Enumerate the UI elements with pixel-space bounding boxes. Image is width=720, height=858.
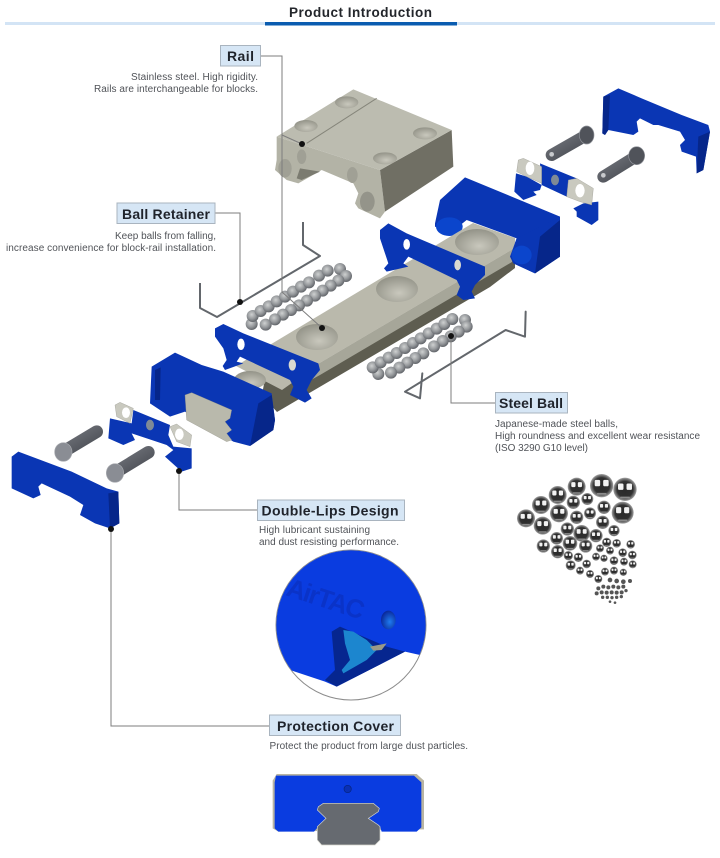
- label: Ball Retainer: increase convenience for block-rail installation.: [6, 243, 216, 254]
- label: Rail: Stainless steel. High rigidity.: [131, 72, 258, 83]
- label: Protection Cover: [108, 526, 468, 752]
- retainer wire near: [200, 222, 320, 317]
- label: Protection Cover: Protection Cover: [277, 718, 395, 734]
- title: [5, 5, 715, 26]
- label: Steel Ball: High roundness and excellent wear resistance: [495, 431, 700, 442]
- far block front overlay: [510, 217, 560, 273]
- retainer wire far: [405, 312, 526, 398]
- near bolts: [55, 432, 148, 482]
- far lip seal: [514, 158, 598, 225]
- label: Steel Ball: (ISO 3290 G10 level): [495, 443, 588, 454]
- steel ball row near: [246, 263, 352, 331]
- label: Ball Retainer: [6, 203, 243, 305]
- detail: double-lip circle: AirTAC: [283, 572, 369, 625]
- label: Ball Retainer: Keep balls from falling,: [115, 231, 216, 242]
- far retainer plate: [380, 223, 485, 300]
- label: Ball Retainer: Ball Retainer: [122, 206, 211, 222]
- label: Steel Ball: Japanese-made steel balls,: [495, 419, 618, 430]
- near end cover: [12, 452, 119, 528]
- detail: protection cover front view: [273, 774, 424, 845]
- label: Rail: [94, 46, 325, 331]
- near block: [150, 353, 275, 446]
- steel ball row far: [367, 313, 473, 380]
- label: Rail: Rails are interchangeable for blocks.: [94, 84, 258, 95]
- far bolts: [549, 126, 645, 178]
- label: Double-Lips Design: Double-Lips Design: [262, 502, 398, 518]
- top block: [275, 89, 453, 218]
- rail: [234, 223, 515, 412]
- title: Product Introduction: [289, 5, 432, 20]
- near retainer plate: [215, 324, 320, 403]
- photo: steel balls: [517, 474, 637, 604]
- label: Double-Lips Design: High lubricant sustaining: [259, 525, 370, 536]
- far end cover: [602, 88, 710, 173]
- label: Steel Ball: Steel Ball: [499, 395, 563, 411]
- illustration: exploded linear guide: [12, 88, 710, 528]
- label: Rail: Rail: [227, 48, 254, 64]
- label: Steel Ball: [448, 333, 700, 454]
- label: Protection Cover: Protect the product from large dust particles.: [270, 741, 468, 752]
- near lip seal: [108, 402, 192, 472]
- label: Double-Lips Design: [176, 468, 404, 548]
- far block: [435, 177, 560, 273]
- label: Double-Lips Design: and dust resisting performance.: [259, 537, 399, 548]
- detail: double-lip circle: [273, 547, 430, 700]
